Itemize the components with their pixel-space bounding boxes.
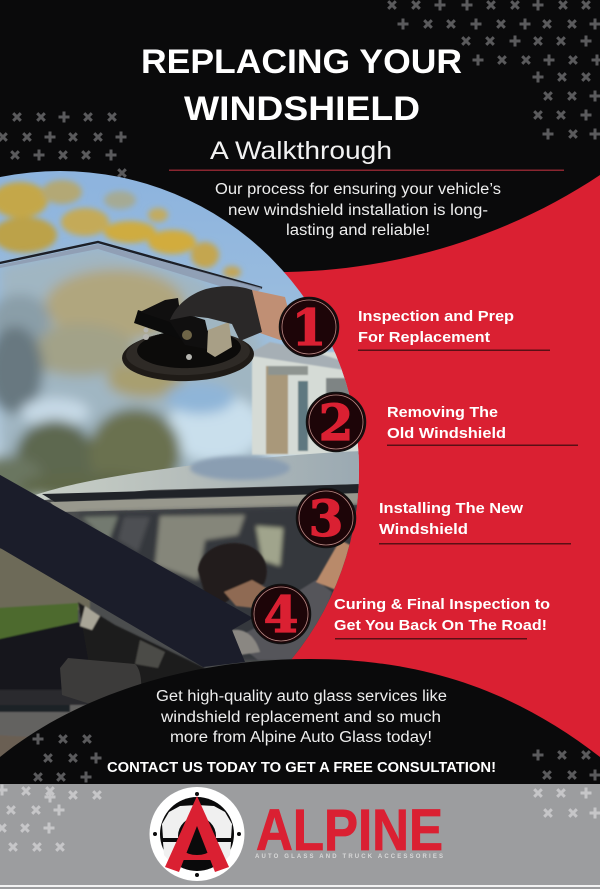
lower car interior xyxy=(0,548,205,762)
gear ring xyxy=(162,805,232,864)
intro paragraph: new windshield installation is long- xyxy=(228,202,488,219)
dotted cross pattern on black xyxy=(3,5,597,173)
bottom black arch xyxy=(0,659,600,784)
logo xyxy=(150,787,443,881)
step 3 label: Windshield xyxy=(379,521,468,538)
step 1 label xyxy=(358,308,514,346)
side mirror xyxy=(60,658,141,704)
step 1 underline xyxy=(358,350,550,351)
closing paragraph: more from Alpine Auto Glass today! xyxy=(170,729,432,746)
emblem bolts xyxy=(153,792,241,877)
gear foot xyxy=(178,850,216,860)
autumn foliage xyxy=(0,180,241,278)
logo emblem xyxy=(150,787,244,881)
intro paragraph: Our process for ensuring your vehicle’s xyxy=(215,181,501,198)
step 4 xyxy=(252,584,550,644)
closing paragraph: Get high-quality auto glass services like xyxy=(156,688,447,705)
step 4 label xyxy=(334,596,550,634)
car body and window interior xyxy=(42,484,362,670)
step 3 label xyxy=(379,500,523,538)
step 2 underline xyxy=(387,444,578,446)
badge 3 xyxy=(296,488,356,548)
closing paragraph xyxy=(156,688,447,746)
badge 2 xyxy=(306,392,366,452)
red panel xyxy=(260,175,600,790)
step 2 label: Old Windshield xyxy=(387,425,506,442)
step 1 label: For Replacement xyxy=(358,329,490,346)
title: WINDSHIELD xyxy=(184,90,420,128)
photo: windshield installation xyxy=(0,165,370,762)
roof reflection xyxy=(190,456,290,480)
step 1 label: Inspection and Prep xyxy=(358,308,514,325)
cross pattern on bottom black xyxy=(38,739,595,777)
gloved hand xyxy=(170,286,262,341)
dark A-pillar band xyxy=(0,472,253,667)
logo wordmark: ALPINE xyxy=(256,798,443,863)
step 2 xyxy=(306,392,578,452)
step 2 label: Removing The xyxy=(387,404,498,421)
step 1 xyxy=(280,298,550,357)
badge 3: 3 xyxy=(309,489,343,548)
glass frame strip xyxy=(0,244,262,296)
closing paragraph: windshield replacement and so much xyxy=(160,709,441,726)
cross pattern on grey xyxy=(2,790,595,847)
forearm xyxy=(252,290,288,340)
sky background xyxy=(0,165,370,505)
house xyxy=(252,342,360,455)
badge 1: 1 xyxy=(292,298,326,357)
car roof xyxy=(35,451,362,500)
gear hub xyxy=(178,817,216,855)
title xyxy=(141,43,462,128)
subtitle: A Walkthrough xyxy=(210,137,392,165)
glass edge xyxy=(0,242,262,288)
footer bottom line xyxy=(0,885,600,887)
step 4 label: Get You Back On The Road! xyxy=(334,617,547,634)
badge 2: 2 xyxy=(319,393,353,452)
step 4 label: Curing & Final Inspection to xyxy=(334,596,550,613)
badge 4: 4 xyxy=(264,585,298,644)
step 3 underline xyxy=(379,543,571,544)
step 3 xyxy=(296,488,571,548)
step 4 underline xyxy=(335,638,527,640)
badge 4 xyxy=(252,584,310,644)
grey footer band xyxy=(0,784,600,889)
subtitle rule xyxy=(169,170,564,171)
logo tagline: AUTO GLASS AND TRUCK ACCESSORIES xyxy=(255,854,443,860)
badge 1 xyxy=(280,298,338,357)
intro paragraph xyxy=(215,181,501,239)
emblem letter A xyxy=(165,796,229,872)
intro paragraph: lasting and reliable! xyxy=(286,222,430,239)
suction cup xyxy=(121,298,255,383)
foot teeth xyxy=(187,860,207,870)
technician xyxy=(198,540,352,660)
title: REPLACING YOUR xyxy=(141,43,462,81)
call to action: CONTACT US TODAY TO GET A FREE CONSULTATION! xyxy=(107,760,496,776)
reflected trees in glass xyxy=(0,246,263,504)
step 3 label: Installing The New xyxy=(379,500,523,517)
step 2 label xyxy=(387,404,506,442)
